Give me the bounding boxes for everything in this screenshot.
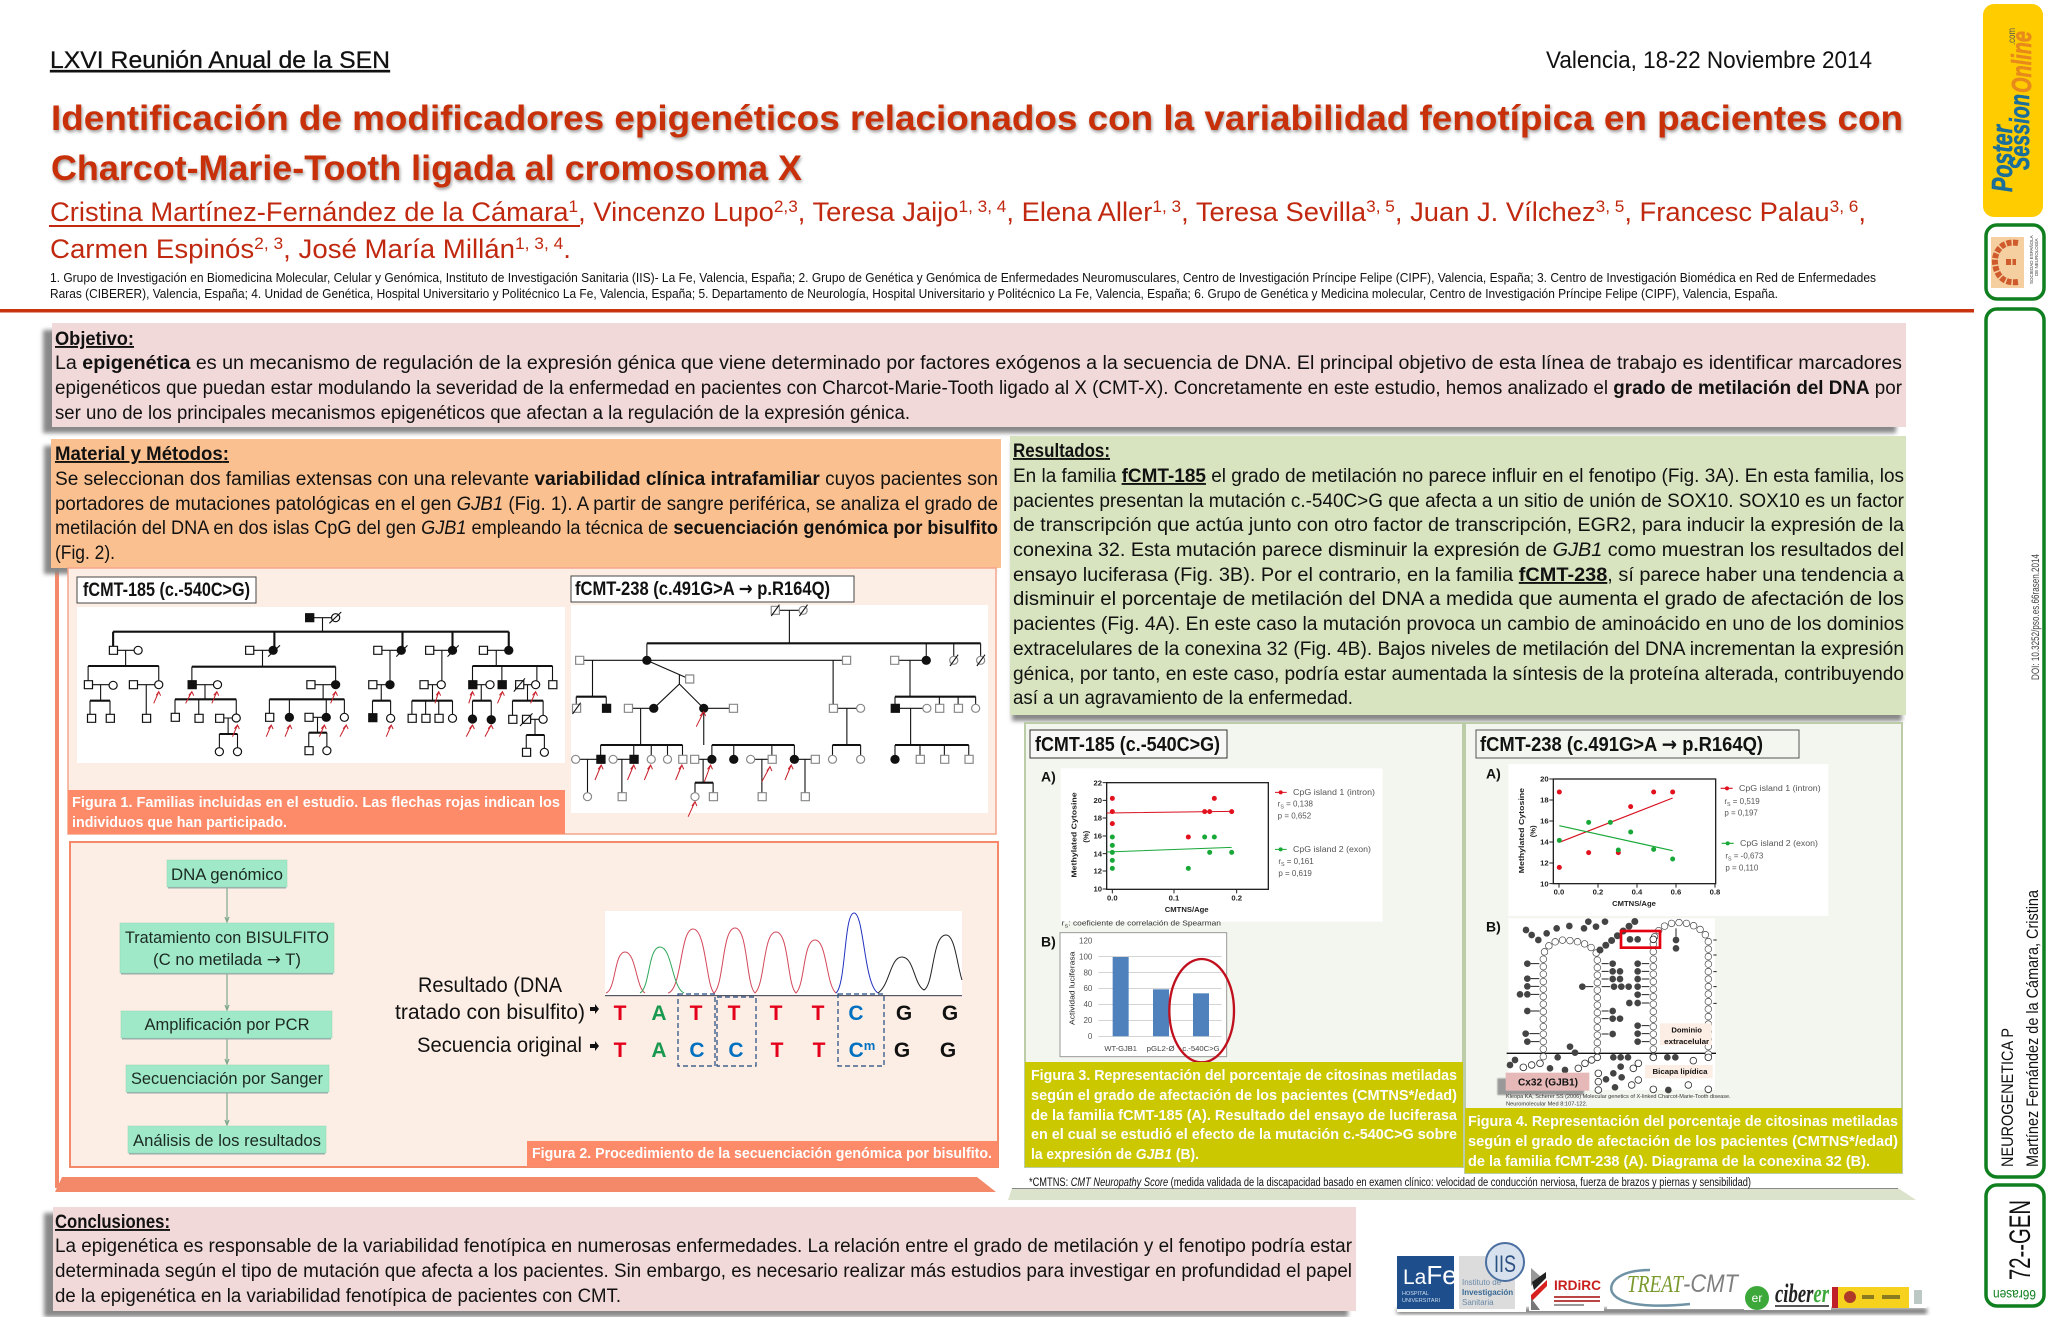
chart 3A: scatter: (%) [1081, 830, 1090, 843]
chart 4A: scatter: 0.4 [1632, 888, 1643, 897]
authors: 2,3 [774, 197, 798, 216]
text: material y metodos: Se seleccionan dos familias extensas con una relevante variabilidad clínica intrafamiliar cuyos pacientes son [55, 469, 998, 490]
label: fCMT-238 pedigree: fCMT-238 (c.491G>A → p.R164Q) [575, 578, 830, 600]
sidebar: poster code: 72--GEN [2004, 1200, 2037, 1280]
chart 3A: scatter: r [1062, 919, 1064, 928]
text: objetivo: La epigenética es un mecanismo de regulación de la expresión génica que viene determinado por factores exógenos a la secuencia de DNA. El principal objetivo de esta línea de trabajo es identificar marcadores [55, 353, 1902, 374]
chart 3B: luciferase bars: 80 [1083, 968, 1093, 977]
authors: , José María Millán [283, 234, 515, 264]
chart 4A: scatter: (%) [1528, 825, 1537, 837]
chart 3A: scatter: A) [1041, 769, 1056, 785]
authors: , [1858, 197, 1866, 227]
flowchart: procedure [120, 860, 334, 1154]
text: conclusiones: La epigenética es responsable de la variabilidad fenotípica en numerosas enfermedades. La relación entre el grado de metilación y el fenotipo podría estar [55, 1236, 1353, 1257]
logo: ciberer [1744, 1279, 1831, 1310]
sidebar: PosterSessionOnline badge: Session [2004, 94, 2035, 170]
panel: objetivo [43, 323, 1906, 433]
heading: objetivo: Objetivo: [55, 329, 134, 350]
chart 3A: scatter: CMTNS/Age [1165, 905, 1209, 914]
sidebar: poster metadata [1986, 309, 2044, 1177]
affiliations: 1. Grupo de Investigación en Biomedicina Molecular, Celular y Genómica, Instituto de Investigación Sanitaria (IIS)- La Fe, Valencia, España; 2. Grupo de Genética y Genómica de Enfermedades Neuromusculares, Centro de Investigación Príncipe Felipe (CIPF), Valencia, España; 3. Centro de Investigación Biomédica en Red de Enfermedades [50, 271, 1876, 285]
chart 4A: scatter: 0.8 [1710, 888, 1721, 897]
step: amplificacion por PCR [121, 1011, 332, 1038]
authors: 1, 3, 4 [515, 234, 563, 253]
sidebar: PosterSessionOnline badge: .com [2007, 28, 2018, 45]
sequence letters: T [614, 1039, 627, 1062]
logo: ciberer: er [1752, 1291, 1762, 1305]
authors: , Elena Aller [1006, 197, 1152, 227]
sequence letters: C [689, 1039, 705, 1062]
chart 4A: scatter: 12 [1540, 859, 1549, 868]
label: dominio extracelular [1660, 1023, 1712, 1046]
chart 4A: scatter: A) [1486, 765, 1501, 781]
step: tratamiento con bisulfito: Tratamiento con BISULFITO [125, 928, 329, 947]
chart 3B: luciferase bars: pGL2-Ø [1147, 1044, 1175, 1053]
chart 4A: scatter: 0.0 [1554, 888, 1564, 897]
chart 4A: scatter: 16 [1540, 817, 1549, 826]
chart 3B: luciferase bars: 20 [1083, 1016, 1093, 1025]
chart 3A: scatter: 14 [1093, 849, 1103, 858]
authors: 2, 3 [254, 234, 283, 253]
text: conclusiones: determinada según el tipo de mutación que afecta a los pacientes. Sin embargo, es necesario realizar más estudios para investigar en profundidad el papel [55, 1261, 1352, 1282]
chart 3A: scatter: 10 [1093, 885, 1102, 894]
caption: figura 3 [1025, 1062, 1463, 1167]
sequence letters [614, 994, 958, 1066]
label: dominio extracelular: Dominio [1671, 1026, 1702, 1035]
sequence letters: T [770, 1002, 783, 1025]
chart 3A: scatter: 20 [1093, 796, 1102, 805]
text: material y metodos: metilación del DNA en dos islas CpG del gen GJB1 empleando la técnica de secuenciación genómica por bisulfito [55, 518, 998, 539]
text: resultados: de transcripción que actúa junto con otro factor de transcripción, EGR2, para inducir la expresión de la [1013, 515, 1904, 536]
sidebar: poster code [1986, 1185, 2044, 1306]
chart 4A: scatter: = -0,673 [1732, 852, 1764, 861]
authors: Cristina Martínez-Fernández de la Cámara [50, 197, 562, 227]
affiliations [50, 271, 1876, 301]
chart 3A: scatter: : coeficiente de correlación de Spearman [1068, 919, 1221, 928]
step: DNA genomico [167, 860, 287, 887]
title: Identificación de modificadores epigenéticos relacionados con la variabilidad fenotípica en pacientes con [51, 99, 1903, 138]
text: resultados: ensayo luciferasa (Fig. 3B). Por el contrario, en la familia fCMT-238, sí parece haber una tendencia a [1013, 565, 1904, 586]
chart 3B: luciferase bars: Actividad luciferasa [1067, 951, 1076, 1025]
substitutions [1529, 928, 1717, 1042]
chart 4A: scatter: 10 [1540, 879, 1549, 888]
footnote: CMTNS: *CMTNS: CMT Neuropathy Score (medida validada de la discapacidad basado en examen clínico: velocidad de conducción nerviosa, fuerza de brazos y piernas y sensibilidad) [1029, 1177, 1751, 1189]
sequence letters: C [849, 1039, 864, 1062]
heading: conclusiones: Conclusiones: [55, 1212, 170, 1233]
caption: figura 3: la expresión de GJB1 (B). [1031, 1146, 1199, 1163]
footnote: CMTNS [1008, 1177, 1916, 1200]
text: resultados: pacientes presentan la mutación c.-540C>G que afecta a un sitio de unión de SOX10. SOX10 es un factor [1013, 491, 1905, 512]
text: resultados: así a un agravamiento de la enfermedad. [1013, 688, 1353, 709]
text: conclusiones: de la epigenética en la variabilidad fenotípica de pacientes con CMT. [55, 1286, 621, 1307]
chart 3B: luciferase bars: 0 [1088, 1032, 1093, 1041]
chart 4A: scatter: 20 [1540, 775, 1549, 784]
panel: figura 1 [68, 568, 996, 834]
sidebar: poster metadata: Martínez Fernández de la Cámara, Cristina [2023, 890, 2042, 1167]
label: dominio extracelular: extracelular [1664, 1037, 1709, 1046]
citation: Kleopa KA, Scherer SS (2006) Molecular genetics of X-linked Charcot-Marie-Tooth disease. [1506, 1094, 1731, 1100]
chart 4A: scatter: r [1724, 797, 1727, 806]
authors: 3, 5 [1366, 197, 1395, 216]
sequence letters: m [864, 1038, 875, 1053]
text: material y metodos [55, 469, 998, 564]
logo: TREAT-CMT: -CMT [1683, 1270, 1740, 1298]
text: material y metodos: portadores de mutaciones patológicas en el gen GJB1 (Fig. 1). A partir de sangre periférica, se analiza el grado de [55, 494, 998, 515]
step: DNA genomico: DNA genómico [171, 865, 283, 884]
chart 3A: scatter: = 0,161 [1285, 857, 1314, 866]
title: Charcot-Marie-Tooth ligada al cromosoma X [51, 149, 803, 188]
chart 4A: scatter: S [1727, 802, 1731, 808]
chromatogram [605, 911, 962, 996]
logo: ministerio [1832, 1287, 1927, 1308]
chart 3A: scatter: S [1064, 923, 1069, 929]
caption: figura 4: según el grado de afectación de los pacientes (CMTNS*/edad) [1468, 1133, 1898, 1150]
logo: TREAT-CMT [1607, 1264, 1744, 1309]
logos [1397, 1240, 1927, 1314]
text: resultados: extracelulares de la conexina 32 (Fig. 4B). Bajos niveles de metilación del DNA incrementan la expresión [1013, 639, 1904, 660]
logo: La Fe and IIS: UNIVERSITARI [1402, 1298, 1441, 1304]
sequence letters: C [848, 1002, 864, 1025]
logo: La Fe and IIS: LaFe [1403, 1260, 1457, 1290]
sequence letters: T [614, 1002, 627, 1025]
sequence letters: T [771, 1039, 784, 1062]
pedigree: family fCMT-185 [84, 612, 557, 756]
labels: sequence rows: Resultado (DNA [418, 974, 562, 997]
authors: , Francesc Palau [1624, 197, 1830, 227]
sequence letters: G [896, 1002, 912, 1025]
chart 4A: scatter [1486, 764, 1828, 916]
citation: Neuromolecular Med 8:107-122. [1506, 1101, 1588, 1107]
authors: 3, 5 [1596, 197, 1624, 216]
sidebar: PosterSessionOnline badge [1983, 4, 2043, 217]
affiliations: Raras (CIBERER), Valencia, España; 4. Unidad de Genética, Hospital Universitario y Politécnico La Fe, Valencia, España; 5. Departamento de Neurología, Hospital Universitario y Politécnico La Fe, Valencia, España; 6. Grupo de Genética y Medicina molecular, Centro de Investigación Príncipe Felipe (CIPF), Valencia, España. [50, 287, 1778, 301]
header: place and date: Valencia, 18-22 Noviembre 2014 [1546, 47, 1872, 74]
chart 3B: luciferase bars: WT-GJB1 [1104, 1044, 1137, 1053]
panel: figura 2 [70, 842, 998, 1167]
chart 3A: scatter: 0.2 [1231, 893, 1242, 902]
sequence letters: G [940, 1039, 956, 1062]
sidebar: poster code: 66rasen [1993, 1287, 2036, 1303]
caption: figura 2: Figura 2. Procedimiento de la secuenciación genómica por bisulfito. [532, 1145, 992, 1162]
chart 4A: scatter: 0.2 [1593, 888, 1603, 897]
caption: figura 3: Figura 3. Representación del porcentaje de citosinas metiladas [1031, 1067, 1457, 1084]
panel: figura 3 [1025, 723, 1463, 1167]
caption: figura 1: individuos que han participado. [72, 814, 287, 831]
sequence letters: T [728, 1002, 741, 1025]
highlight: mutation box [1621, 931, 1660, 948]
caption: figura 4 [1465, 1108, 1902, 1173]
chart 4A: scatter: S [1728, 857, 1732, 863]
chart 3A: scatter: Methylated Cytosine [1070, 792, 1079, 878]
sequence letters: T [812, 1002, 825, 1025]
transmembrane chains [1543, 920, 1708, 1057]
logo: ciberer: ciberer [1775, 1279, 1830, 1308]
panel: resultados [1010, 436, 1906, 721]
step: analisis de los resultados: Análisis de los resultados [133, 1131, 321, 1150]
chart 4A: scatter: CpG island 2 (exon) [1740, 839, 1818, 848]
sequence letters: T [813, 1039, 826, 1062]
chart 4A: scatter: p = 0,197 [1724, 809, 1758, 818]
header: congress name: LXVI Reunión Anual de la SEN [50, 47, 390, 74]
diagram 4B: connexin 32: B) [1486, 919, 1501, 935]
text: objetivo: ser uno de los principales mecanismos epigenéticos que afectan a la regulación de la expresión génica. [55, 403, 910, 424]
text: material y metodos: (Fig. 2). [55, 543, 115, 564]
authors: 3, 6 [1830, 197, 1858, 216]
text: resultados: génica, por tanto, en este caso, podría estar aumentada la síntesis de la proteína alterada, contribuyendo [1013, 664, 1904, 685]
logo: La Fe and IIS: IIS [1494, 1251, 1516, 1278]
sidebar: society logo: SOCIEDAD ESPAÑOLA [2028, 235, 2034, 284]
label: fCMT-185 pedigree: fCMT-185 (c.-540C>G) [83, 580, 250, 601]
logo: La Fe and IIS: HOSPITAL [1402, 1291, 1429, 1297]
step: tratamiento con bisulfito [120, 923, 334, 973]
step: tratamiento con bisulfito: (C no metilada → T) [153, 950, 301, 970]
heading: material y metodos: Material y Métodos: [55, 444, 229, 465]
citation [1506, 1094, 1731, 1107]
chart 3A: scatter: S [1281, 862, 1285, 868]
caption: figura 3: según el grado de afectación de los pacientes (CMTNS*/edad) [1031, 1087, 1457, 1104]
chart 3A: scatter: CpG island 2 (exon) [1293, 845, 1371, 854]
chart 3A: scatter: 0.0 [1107, 893, 1118, 902]
title [51, 99, 1903, 188]
sidebar: poster metadata: DOI: 10.3252/pso.es.66rasen.2014 [2030, 554, 2042, 680]
label: Cx32 (GJB1): Cx32 (GJB1) [1518, 1078, 1578, 1089]
sidebar: PosterSessionOnline badge: Poster [1987, 124, 2019, 192]
chart 3B: luciferase bars: B) [1041, 934, 1056, 950]
sequence letters: G [942, 1002, 958, 1025]
logo: TREAT-CMT: TREAT [1627, 1272, 1684, 1298]
label: fCMT-185: fCMT-185 (c.-540C>G) [1035, 734, 1220, 756]
step: analisis de los resultados [128, 1126, 326, 1153]
caption: figura 4: de la familia fCMT-238 (A). Diagrama de la conexina 32 (B). [1468, 1153, 1870, 1170]
labels: sequence rows [395, 974, 599, 1057]
pedigree: family fCMT-238 [572, 605, 985, 817]
authors: , Vincenzo Lupo [578, 197, 774, 227]
caption: figura 1: Figura 1. Familias incluidas en el estudio. Las flechas rojas indican los [72, 794, 560, 811]
chart 3B: luciferase bars: 120 [1079, 936, 1093, 945]
chart 3A: scatter: 22 [1093, 778, 1102, 787]
chart 3A: scatter: 16 [1093, 832, 1102, 841]
diagram 4B: connexin 32 [1486, 918, 1731, 1107]
sequence letters: A [651, 1039, 667, 1062]
authors: 1, 3, 4 [958, 197, 1006, 216]
authors: , Teresa Jaijo [798, 197, 958, 227]
panel: figura 4 [1465, 723, 1902, 1173]
authors: 1 [569, 197, 578, 216]
sidebar: society logo [1986, 225, 2044, 299]
logo: La Fe and IIS [1397, 1240, 1526, 1312]
logo: La Fe and IIS: Investigación [1462, 1288, 1513, 1297]
authors: , Teresa Sevilla [1181, 197, 1367, 227]
chart 4A: scatter: 0.6 [1671, 888, 1681, 897]
caption: figura 4: Figura 4. Representación del porcentaje de citosinas metiladas [1468, 1113, 1898, 1130]
chart 3A: scatter: 18 [1093, 814, 1103, 823]
chart 4A: scatter: = 0,519 [1731, 797, 1760, 806]
sequence letters: A [651, 1002, 667, 1025]
chart 4A: scatter: r [1725, 852, 1728, 861]
caption: figura 3: de la familia fCMT-185 (A). Resultado del ensayo de luciferasa [1031, 1107, 1458, 1124]
sequence letters: G [894, 1039, 910, 1062]
logo: La Fe and IIS: Sanitaria [1462, 1298, 1494, 1307]
labels: sequence rows: tratado con bisulfito) [395, 1001, 585, 1024]
step: secuenciacion por Sanger: Secuenciación por Sanger [131, 1069, 323, 1088]
authors: Carmen Espinós [50, 234, 250, 264]
chart 3B: luciferase bars: c.-540C>G [1182, 1044, 1220, 1053]
chart 3B: luciferase bars: 40 [1083, 1000, 1093, 1009]
chart 4A: scatter: CpG island 1 (intron) [1739, 784, 1821, 793]
chart 3A: scatter: p = 0,652 [1278, 812, 1312, 821]
chart 3A: scatter: 0.1 [1169, 893, 1180, 902]
text: resultados: disminuir el porcentaje de metilación del DNA a medida que aumenta el grado de afectación de los [1013, 589, 1904, 610]
chart 3A: scatter: = 0,138 [1284, 800, 1314, 809]
text: conclusiones [55, 1236, 1353, 1307]
authors [49, 197, 1866, 264]
sidebar: society logo: DE NEUROLOGÍA [2033, 238, 2039, 276]
panel: conclusiones [44, 1207, 1356, 1317]
sequence letters: C [728, 1039, 744, 1062]
authors: , Juan J. Vílchez [1395, 197, 1596, 227]
chart 3A: scatter: r [1278, 857, 1281, 866]
panel: material y metodos container [44, 439, 1001, 1192]
labels: sequence rows: Secuencia original [417, 1034, 582, 1057]
step: amplificacion por PCR: Amplificación por PCR [144, 1015, 310, 1034]
text: resultados [1013, 466, 1905, 709]
chart 3A: scatter: CpG island 1 (intron) [1293, 788, 1375, 797]
label: bicapa lipidica: Bicapa lipídica [1652, 1067, 1708, 1076]
chart 4A: scatter: 14 [1540, 838, 1549, 847]
chart 4A: scatter: Methylated Cytosine [1517, 788, 1526, 873]
text: resultados: En la familia fCMT-185 el grado de metilación no parece influir en el fenotipo (Fig. 3A). En esta familia, los [1013, 466, 1904, 487]
chart 3A: scatter: 12 [1093, 867, 1102, 876]
heading: resultados: Resultados: [1013, 441, 1110, 462]
logo: La Fe and IIS: Instituto de [1462, 1278, 1502, 1287]
text: objetivo [55, 353, 1903, 424]
chart 3B: luciferase bars: 60 [1083, 984, 1093, 993]
label: bicapa lipidica [1645, 1065, 1713, 1078]
chart 3A: scatter [1041, 768, 1383, 929]
sidebar: PosterSessionOnline badge: Online [2006, 31, 2037, 93]
label: Cx32 (GJB1) [1497, 1073, 1589, 1095]
text: objetivo: epigenéticos que puedan estar modulando la severidad de la enfermedad en pacientes con Charcot-Marie-Tooth ligado al X (CMT-X). Concretamente en este estudio, hemos analizado el grado de metilación del DNA por [55, 378, 1903, 399]
logo: IRDiRC [1529, 1263, 1604, 1311]
logo: IRDiRC: IRDiRC [1554, 1277, 1601, 1293]
sidebar: poster metadata: NEUROGENETICA P [1998, 1028, 2017, 1167]
sequence letters: T [690, 1002, 703, 1025]
chart 3A: scatter: S [1280, 805, 1284, 811]
authors: 1, 3 [1152, 197, 1181, 216]
text: resultados: pacientes (Fig. 4A). En este caso la mutación provoca un cambio de aminoácido en uno de los dominios [1013, 614, 1904, 635]
highlight: red ellipse [1169, 959, 1234, 1062]
chart 3B: luciferase bars [1041, 933, 1234, 1062]
text: resultados: conexina 32. Esta mutación parece disminuir la expresión de GJB1 como muestran los resultados del [1013, 540, 1904, 561]
step: secuenciacion por Sanger [126, 1065, 329, 1092]
caption: figura 2 [527, 1141, 998, 1167]
chart 4A: scatter: p = 0,110 [1725, 863, 1759, 872]
chart 3B: luciferase bars: 100 [1079, 952, 1093, 961]
authors: . [563, 234, 571, 264]
chart 4A: scatter: CMTNS/Age [1612, 899, 1656, 908]
caption: figura 1 [68, 790, 565, 834]
caption: figura 3: en el cual se estudió el efecto de la mutación c.-540C>G sobre [1031, 1126, 1457, 1143]
label: fCMT-238: fCMT-238 (c.491G>A → p.R164Q) [1480, 732, 1763, 756]
chart 3A: scatter: r [1278, 800, 1280, 809]
chart 3A: scatter: p = 0,619 [1278, 869, 1312, 878]
chart 4A: scatter: 18 [1540, 796, 1549, 805]
